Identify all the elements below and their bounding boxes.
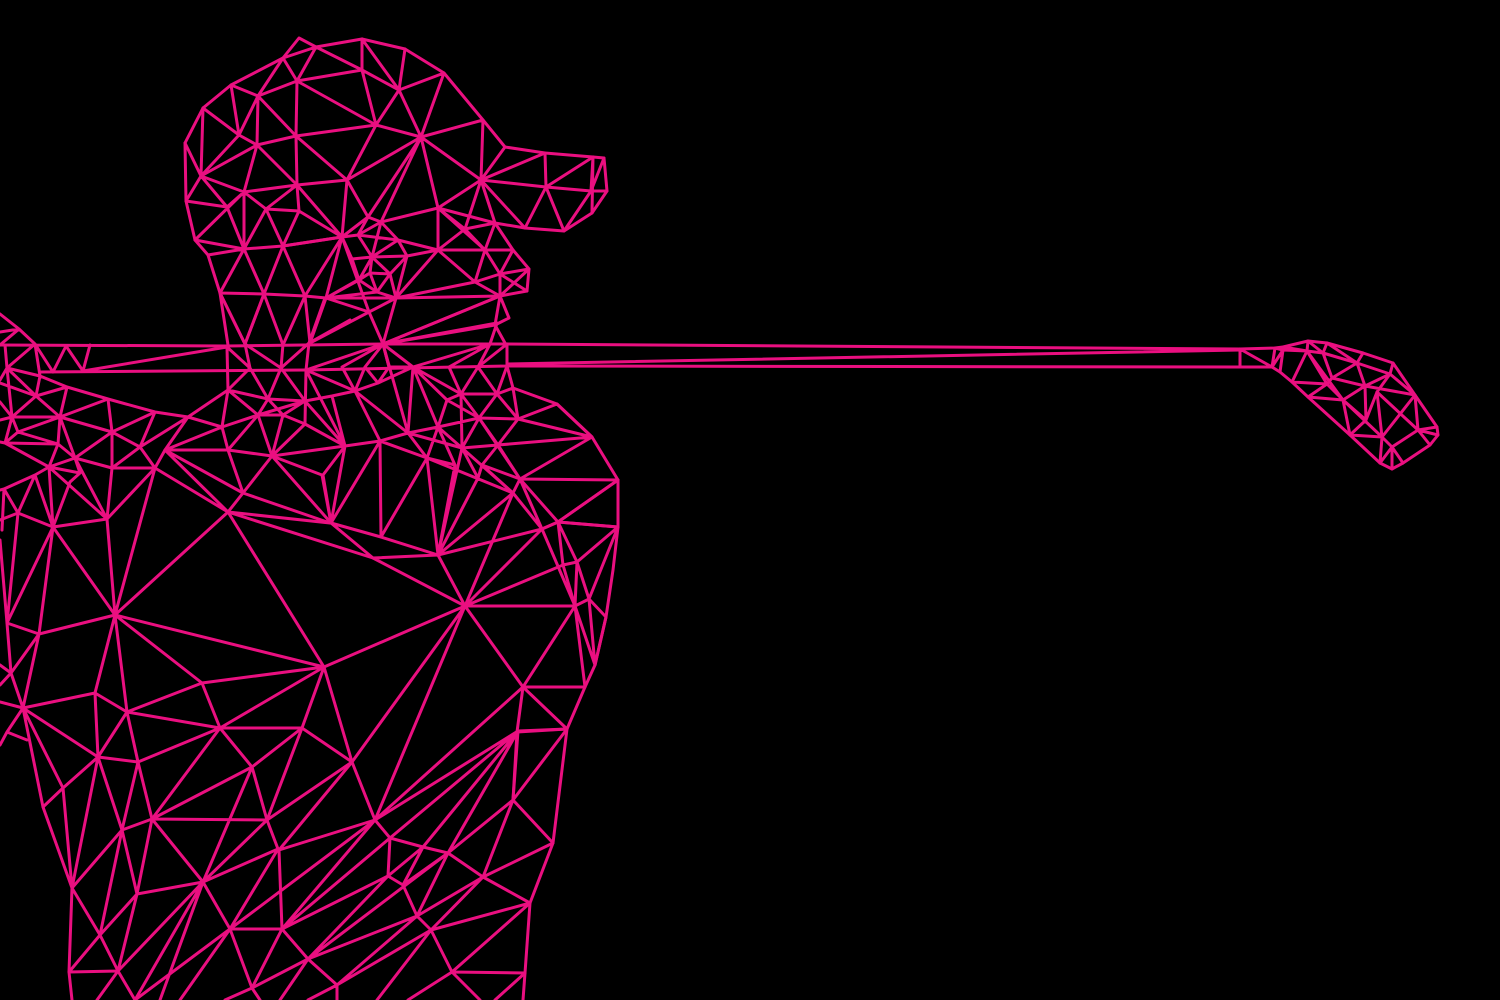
golfer lower right body bbox=[225, 728, 567, 1000]
golfer left arm bbox=[0, 314, 258, 530]
golfer lower left body bbox=[43, 757, 375, 1000]
golfer head and cap bbox=[185, 38, 607, 345]
golfer chest and shoulder bbox=[155, 296, 618, 1000]
golfer neck and collar bbox=[220, 293, 413, 456]
golf club head bbox=[1240, 341, 1438, 469]
golf club shaft bbox=[0, 344, 1240, 372]
golfer torso bbox=[0, 468, 618, 820]
